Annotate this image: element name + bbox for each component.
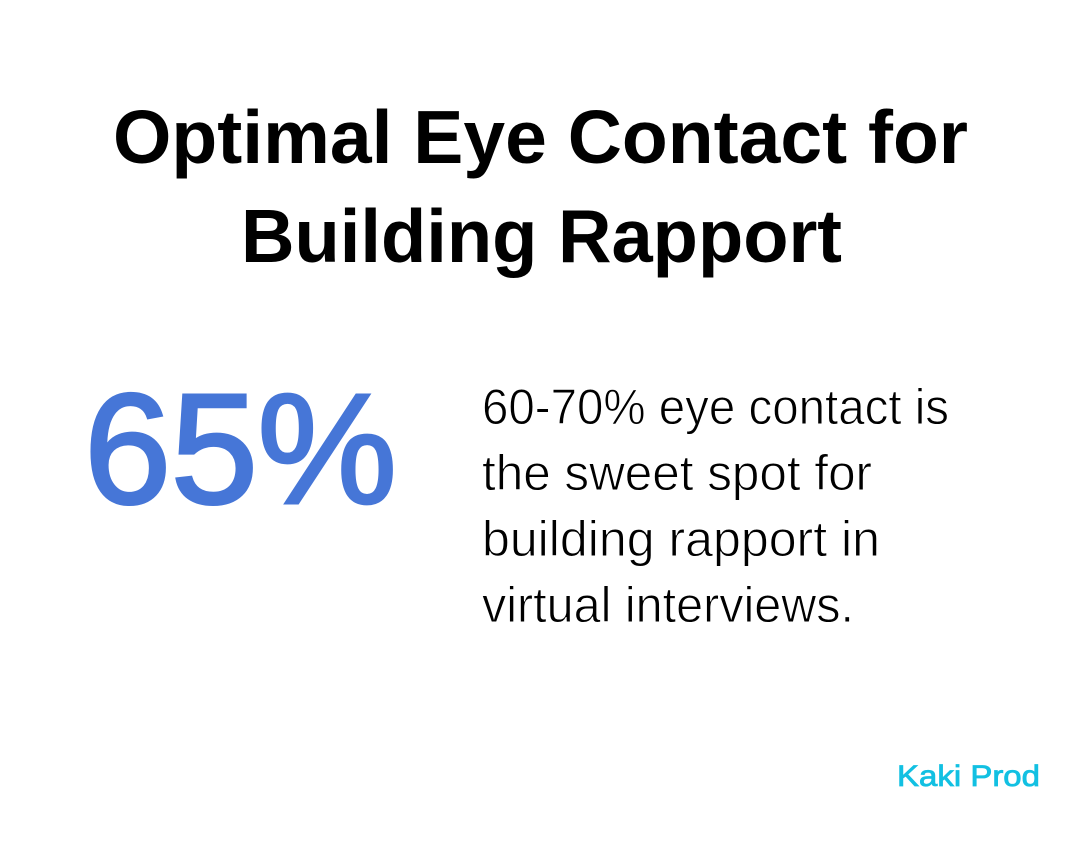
description text: the sweet spot for	[482, 445, 872, 501]
description text: 60-70% eye contact is	[482, 379, 949, 435]
description text: building rapport in	[482, 511, 880, 567]
description text	[482, 379, 949, 633]
title	[113, 95, 968, 278]
title: Optimal Eye Contact for	[113, 95, 968, 179]
logo: Kaki Prod: Kaki Prod	[897, 760, 1040, 793]
description text: virtual interviews.	[482, 577, 854, 633]
title: Building Rapport	[241, 194, 842, 278]
big statistic: 65%: 65%	[84, 362, 397, 537]
